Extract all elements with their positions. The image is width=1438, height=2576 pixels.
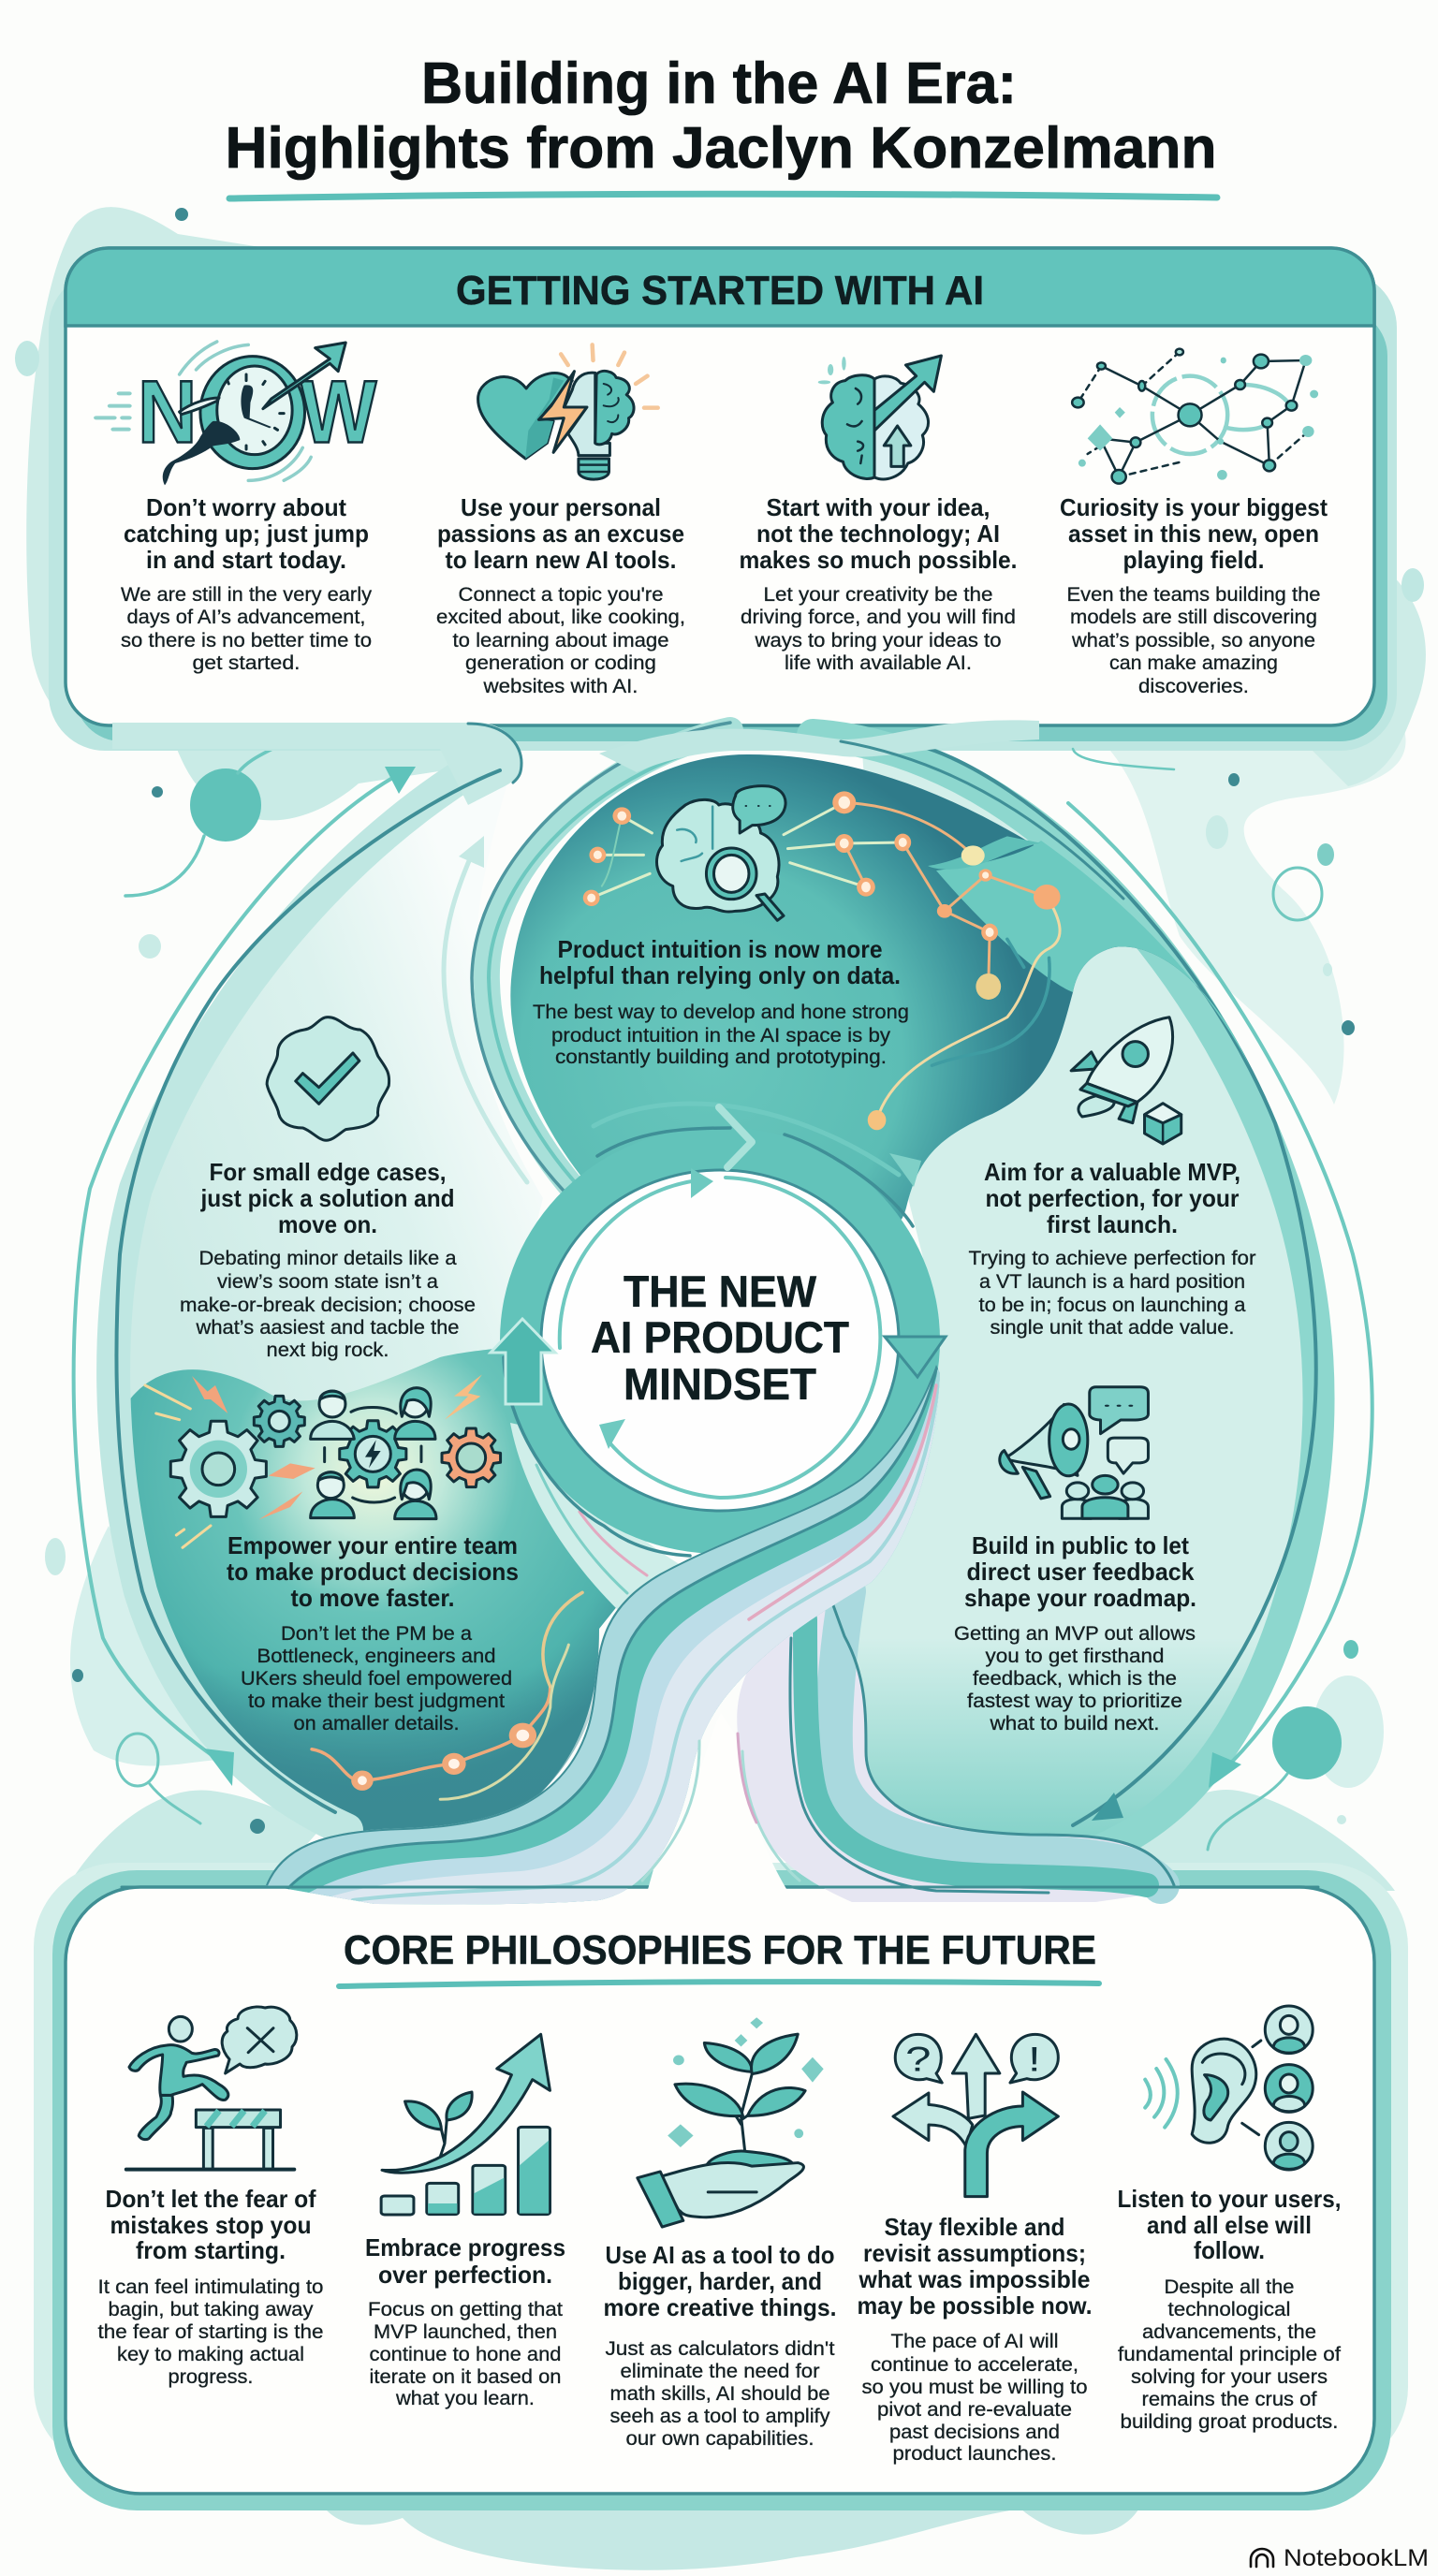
icon: brain with magnifier and glowing nodes xyxy=(583,786,1061,1130)
intuition text xyxy=(533,935,909,1068)
panel heading: getting started: GETTING STARTED WITH AI xyxy=(456,268,984,314)
panel heading: core philosophies: CORE PHILOSOPHIES FOR THE FUTURE xyxy=(344,1927,1096,1973)
body: constantly building and prototyping. xyxy=(555,1046,887,1068)
panel: getting started background xyxy=(49,248,1397,751)
icon: brain with growth arrow xyxy=(818,356,941,479)
body: websites with AI. xyxy=(482,676,638,697)
body: The best way to develop and hone strong xyxy=(533,1002,909,1023)
center heading: THE NEW xyxy=(624,1266,817,1316)
heading: Stay flexible and xyxy=(884,2213,1065,2241)
icon: forked arrows: ! xyxy=(1028,2042,1041,2079)
body: Despite all the xyxy=(1165,2276,1294,2298)
philosophy 3: AI as a tool xyxy=(603,2241,837,2450)
body: Bottleneck, engineers and xyxy=(257,1646,496,1667)
heading: over perfection. xyxy=(378,2261,552,2289)
heading: Start with your idea, xyxy=(766,493,990,521)
body: models are still discovering xyxy=(1070,607,1317,628)
heading: playing field. xyxy=(1123,546,1264,574)
body: excited about, like cooking, xyxy=(436,607,685,628)
body: Connect a topic you're xyxy=(459,584,663,606)
philosophy 2: progress over perfection xyxy=(365,2233,565,2409)
icon: plant in hand xyxy=(638,2017,824,2227)
body: Don’t let the PM be a xyxy=(281,1623,472,1645)
body: fastest way to prioritize xyxy=(967,1690,1182,1712)
heading xyxy=(539,935,901,989)
panel top edge over braid xyxy=(122,1885,1318,1889)
build in public text xyxy=(954,1531,1196,1734)
philosophy 5: listen to users xyxy=(1118,2185,1341,2433)
body: seeh as a tool to amplify xyxy=(610,2406,830,2427)
heading: and all else will xyxy=(1147,2211,1312,2239)
title underline xyxy=(229,194,1217,198)
braid: left strand xyxy=(266,1365,940,1904)
body xyxy=(954,1623,1196,1734)
heading xyxy=(603,2241,837,2321)
body: solving for your users xyxy=(1131,2366,1328,2388)
body xyxy=(861,2331,1088,2465)
body xyxy=(968,1248,1256,1339)
heading xyxy=(105,2185,316,2264)
central flow: left pale body xyxy=(118,772,637,1835)
body xyxy=(533,1002,909,1068)
body: product launches. xyxy=(893,2443,1056,2465)
heading: more creative things. xyxy=(603,2293,837,2321)
heading: makes so much possible. xyxy=(740,546,1017,574)
body: Focus on getting that xyxy=(368,2299,563,2320)
heading: Empower your entire team xyxy=(227,1531,518,1559)
central ring xyxy=(491,1107,946,1556)
heading xyxy=(200,1158,455,1238)
body: The pace of AI will xyxy=(891,2331,1058,2352)
body: get started. xyxy=(193,652,300,674)
heading xyxy=(858,2213,1092,2320)
icon: constellation network xyxy=(1072,349,1318,484)
body xyxy=(605,2338,835,2450)
heading: just pick a solution and xyxy=(200,1184,455,1212)
body: continue to hone and xyxy=(369,2344,562,2365)
philosophy 1: fear of mistakes xyxy=(97,2185,324,2388)
heading: may be possible now. xyxy=(858,2291,1092,2320)
center heading xyxy=(591,1266,849,1409)
body: to learning about image xyxy=(453,630,668,651)
body: what to build next. xyxy=(989,1713,1159,1734)
heading xyxy=(1118,2185,1341,2264)
body xyxy=(121,584,373,674)
icon: gears and team xyxy=(145,1374,501,1547)
center heading: AI PRODUCT xyxy=(591,1312,849,1362)
body: single unit that adde value. xyxy=(990,1317,1234,1339)
heading: Use your personal xyxy=(461,493,661,521)
icon: NOW clock runner: W xyxy=(301,362,377,461)
heading: Product intuition is now more xyxy=(558,935,882,963)
body xyxy=(1067,584,1320,697)
heading: passions as an excuse xyxy=(437,520,684,548)
heading: Curiosity is your biggest xyxy=(1060,493,1328,521)
heading: catching up; just jump xyxy=(124,520,369,548)
MVP text xyxy=(968,1158,1256,1339)
column 4: curiosity xyxy=(1060,493,1328,697)
philosophy 4: stay flexible xyxy=(858,2213,1092,2465)
heading: to learn new AI tools. xyxy=(446,546,676,574)
center heading: MINDSET xyxy=(624,1359,816,1409)
heading: For small edge cases, xyxy=(210,1158,446,1186)
icon: plant, bars and growth arrow xyxy=(381,2034,550,2215)
heading: asset in this new, open xyxy=(1068,520,1319,548)
heading: follow. xyxy=(1194,2236,1265,2264)
body: our own capabilities. xyxy=(625,2428,814,2450)
braid: right strand xyxy=(737,1591,1174,1902)
body: view’s soom state isn’t a xyxy=(217,1271,438,1293)
heading: to move faster. xyxy=(290,1584,455,1612)
body: math skills, AI should be xyxy=(610,2383,829,2405)
body: what’s possible, so anyone xyxy=(1071,630,1315,651)
body: technological xyxy=(1168,2299,1290,2320)
icon: megaphone, speech bubbles and people xyxy=(1000,1387,1148,1518)
body: advancements, the xyxy=(1142,2321,1316,2343)
body: pivot and re-evaluate xyxy=(877,2399,1072,2421)
body: eliminate the need for xyxy=(620,2361,820,2382)
body: a VT launch is a hard position xyxy=(979,1271,1245,1293)
body: life with available AI. xyxy=(785,652,972,674)
icon: runner over hurdle xyxy=(126,2007,297,2170)
heading: what was impossible xyxy=(858,2265,1090,2293)
thin line under braid xyxy=(642,1741,699,1881)
body xyxy=(368,2299,563,2409)
body: what you learn. xyxy=(395,2388,535,2409)
body: key to making actual xyxy=(117,2344,304,2365)
body: ways to bring your ideas to xyxy=(754,630,1002,651)
body: make-or-break decision; choose xyxy=(180,1295,476,1316)
icon: ear and users xyxy=(1145,2006,1313,2170)
heading xyxy=(740,493,1017,574)
heading: Don’t worry about xyxy=(146,493,346,521)
heading: to make product decisions xyxy=(227,1558,519,1586)
body xyxy=(97,2276,324,2388)
body: remains the crus of xyxy=(1142,2389,1317,2410)
heading xyxy=(365,2233,565,2289)
column 2: personal passions xyxy=(436,493,685,697)
body: continue to accelerate, xyxy=(871,2354,1078,2376)
panel heading underline xyxy=(339,1982,1099,1986)
heading: Aim for a valuable MVP, xyxy=(984,1158,1240,1186)
heading: not the technology; AI xyxy=(756,520,1000,548)
body xyxy=(1118,2276,1341,2433)
icon: forked arrows xyxy=(893,2034,1058,2197)
central flow: lower-left teal region xyxy=(126,1348,637,1835)
body: Getting an MVP out allows xyxy=(954,1623,1196,1645)
body: We are still in the very early xyxy=(121,584,373,606)
central flow: right ribbon and arrow xyxy=(813,735,1372,1863)
central flow: left ribbon and arrows xyxy=(74,723,527,1830)
heading xyxy=(984,1158,1240,1238)
heading: Don’t let the fear of xyxy=(105,2185,316,2213)
body: feedback, which is the xyxy=(973,1668,1177,1690)
NotebookLM logo: NotebookLM xyxy=(1284,2545,1429,2571)
body: progress. xyxy=(169,2366,253,2388)
heading xyxy=(437,493,684,574)
central flow: dark teal intuition region xyxy=(510,754,1250,1222)
icon: rocket and cube xyxy=(1071,1017,1181,1144)
body: so you must be willing to xyxy=(861,2377,1088,2398)
heading: bigger, harder, and xyxy=(618,2267,822,2295)
body: Just as calculators didn't xyxy=(605,2338,835,2360)
body: building groat products. xyxy=(1120,2411,1339,2433)
body: bagin, but taking away xyxy=(109,2299,314,2320)
body: so there is no better time to xyxy=(121,630,372,651)
column 3: idea first xyxy=(740,493,1017,674)
icon: forked arrows: ? xyxy=(905,2042,931,2079)
heading: Embrace progress xyxy=(365,2233,565,2261)
body: MVP launched, then xyxy=(374,2321,557,2343)
body: what’s aasiest and tacble the xyxy=(195,1317,459,1339)
heading: move on. xyxy=(278,1210,377,1238)
panel: core philosophies background xyxy=(52,1870,1391,2510)
white gap between braid legs xyxy=(642,1713,800,1910)
body: discoveries. xyxy=(1138,676,1249,697)
body: Debating minor details like a xyxy=(198,1248,457,1269)
body: driving force, and you will find xyxy=(741,607,1016,628)
body: product intuition in the AI space is by xyxy=(551,1025,891,1046)
heading: shape your roadmap. xyxy=(964,1584,1196,1612)
body xyxy=(180,1248,476,1361)
heading: Use AI as a tool to do xyxy=(605,2241,835,2269)
column 1: catching up xyxy=(121,493,373,674)
body: past decisions and xyxy=(889,2422,1060,2443)
body: you to get firsthand xyxy=(985,1646,1165,1667)
edge cases text xyxy=(180,1158,476,1361)
strand below ring xyxy=(510,1423,693,1610)
body: Even the teams building the xyxy=(1067,584,1320,606)
heading xyxy=(964,1531,1196,1612)
heading xyxy=(124,493,369,574)
central flow: pale right body xyxy=(823,739,1318,1849)
heading xyxy=(227,1531,519,1612)
heading: first launch. xyxy=(1047,1210,1178,1238)
title xyxy=(225,51,1217,181)
body: fundamental principle of xyxy=(1118,2344,1341,2365)
heading: mistakes stop you xyxy=(110,2211,311,2239)
body: next big rock. xyxy=(266,1339,389,1361)
body: to be in; focus on launching a xyxy=(979,1295,1246,1316)
title: Highlights from Jaclyn Konzelmann xyxy=(225,116,1217,181)
icon: check badge xyxy=(267,1017,389,1140)
body: to make their best judgment xyxy=(248,1690,505,1712)
body: UKers sheuld foel empowered xyxy=(241,1668,512,1690)
body: can make amazing xyxy=(1109,652,1278,674)
body: days of AI’s advancement, xyxy=(127,607,365,628)
icon: NOW clock runner: N xyxy=(138,362,197,461)
heading: helpful than relying only on data. xyxy=(539,961,901,989)
icon: heart bolt brain bulb xyxy=(478,344,658,479)
empower text xyxy=(227,1531,519,1734)
body: iterate on it based on xyxy=(369,2366,562,2388)
icon: NOW clock runner xyxy=(94,342,377,485)
body: Let your creativity be the xyxy=(764,584,992,606)
heading: not perfection, for your xyxy=(985,1184,1240,1212)
heading: from starting. xyxy=(136,2236,286,2264)
central flow: arch over intuition region xyxy=(472,720,1174,1217)
body: generation or coding xyxy=(465,652,656,674)
body: Trying to achieve perfection for xyxy=(968,1248,1256,1269)
body xyxy=(436,584,685,697)
body: It can feel intimulating to xyxy=(97,2276,324,2298)
heading: direct user feedback xyxy=(966,1558,1195,1586)
body xyxy=(241,1623,512,1734)
body: on amaller details. xyxy=(294,1713,459,1734)
heading: in and start today. xyxy=(146,546,346,574)
orange path with nodes xyxy=(312,1592,582,1799)
body xyxy=(741,584,1016,674)
heading: Build in public to let xyxy=(972,1531,1189,1559)
heading xyxy=(1060,493,1328,574)
body: the fear of starting is the xyxy=(97,2321,324,2343)
title: Building in the AI Era: xyxy=(421,51,1017,116)
heading: revisit assumptions; xyxy=(863,2239,1086,2267)
heading: Listen to your users, xyxy=(1118,2185,1341,2213)
